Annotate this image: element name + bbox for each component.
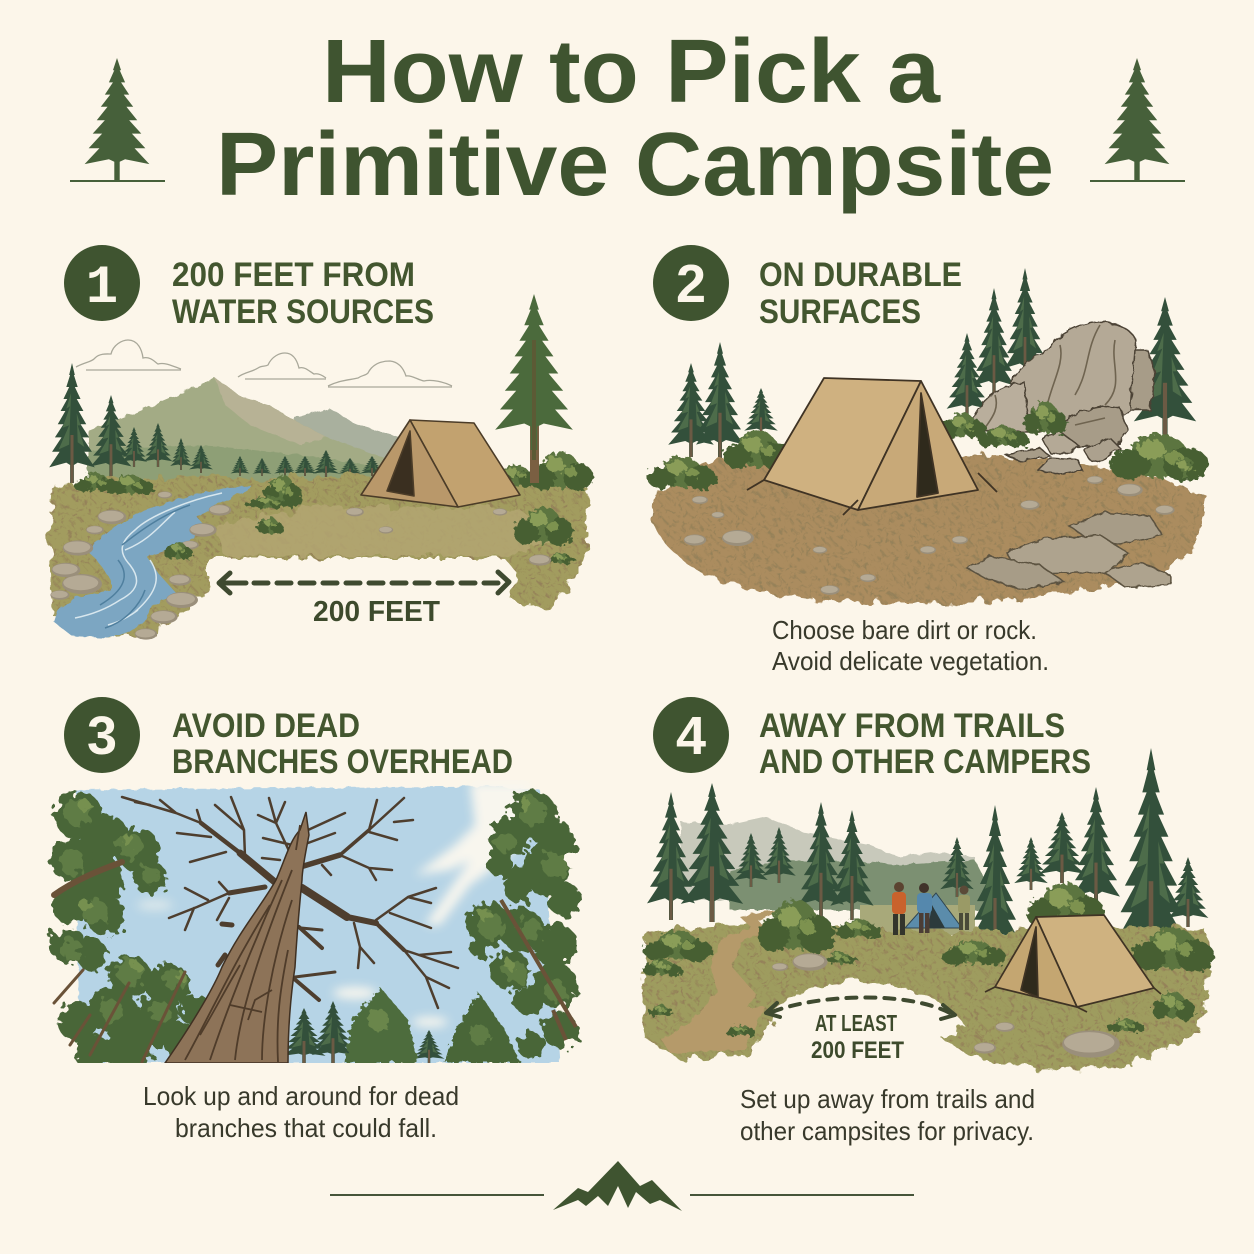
background meadow — [860, 905, 975, 935]
panel: 200 feet from water — [49, 245, 593, 640]
heading: away from trails and other campers — [759, 707, 1091, 781]
illustration: tent on bare ground — [647, 268, 1209, 603]
tent — [985, 915, 1161, 1012]
distance label: 200 FEET — [811, 1037, 904, 1064]
heading: on durable surfaces: SURFACES — [759, 293, 921, 331]
river — [54, 486, 252, 638]
distance label: 200 FEET — [313, 596, 440, 628]
stones — [772, 953, 1120, 1058]
heading: 200 feet from water sources: 200 FEET FROM — [172, 256, 415, 294]
caption — [740, 1084, 1035, 1146]
step number 3 — [64, 697, 140, 773]
hazy mountains — [681, 817, 975, 900]
boulders — [969, 322, 1155, 474]
dirt trail — [662, 910, 780, 1053]
left foliage — [50, 791, 211, 1072]
illustration: campsite away from trail — [642, 748, 1214, 1070]
hazy distant forest — [730, 860, 1000, 910]
step number 4: 4 — [676, 706, 706, 766]
caption: other campsites for privacy. — [740, 1116, 1034, 1146]
distant treetops — [282, 988, 520, 1063]
distance arrow — [219, 572, 509, 593]
caption: Look up and around for dead — [143, 1081, 459, 1111]
step number 1 — [64, 245, 140, 321]
bark texture — [185, 825, 300, 1062]
riverbank stones — [50, 491, 231, 640]
caption — [772, 615, 1049, 676]
camper in blue — [917, 883, 932, 933]
step number 3: 3 — [87, 706, 117, 766]
icon: left pine tree — [70, 58, 165, 182]
tent — [361, 420, 520, 507]
heading: away from trails and other campers: AWAY FROM TRAILS — [759, 707, 1065, 745]
heading: 200 feet from water sources: WATER SOURCES — [172, 293, 434, 331]
heading: on durable surfaces: ON DURABLE — [759, 256, 962, 294]
dry grass patch — [215, 505, 560, 556]
panel: dead branches — [50, 697, 582, 1143]
camper in orange — [892, 882, 906, 935]
tall pine — [495, 294, 573, 483]
clouds — [137, 782, 530, 1027]
sky — [75, 786, 560, 1063]
left tree trunks — [54, 862, 185, 1062]
ground — [650, 455, 1206, 603]
flat rocks — [967, 512, 1172, 589]
forest floor — [642, 923, 1211, 1070]
mountains — [88, 378, 402, 490]
right foliage — [468, 791, 582, 1060]
meadow — [50, 475, 588, 640]
distance arc arrow — [766, 997, 955, 1019]
step number 2: 2 — [676, 254, 706, 314]
bushes — [74, 452, 593, 564]
rock cracks — [985, 325, 1116, 428]
panel: durable surfaces — [647, 245, 1209, 676]
scattered stones — [684, 476, 1175, 595]
title — [216, 22, 1054, 215]
illustration: looking up at a dead tree — [50, 782, 582, 1072]
small ground stones — [346, 508, 551, 566]
title: Primitive Campsite — [216, 115, 1054, 215]
camper in olive — [958, 886, 970, 930]
caption: Avoid delicate vegetation. — [772, 646, 1049, 676]
tent — [747, 378, 997, 515]
heading: away from trails and other campers: AND OTHER CAMPERS — [759, 743, 1091, 781]
caption: Set up away from trails and — [740, 1084, 1035, 1114]
forest — [647, 748, 1208, 970]
tent door — [928, 905, 945, 928]
icon: right pine tree — [1090, 58, 1185, 182]
distant tree line — [49, 363, 384, 483]
heading: avoid dead branches overhead: AVOID DEAD — [172, 707, 360, 745]
panel: away from trails — [642, 697, 1214, 1146]
dead branches — [122, 797, 458, 1008]
pines — [668, 268, 1196, 460]
heading: avoid dead branches overhead — [172, 707, 513, 781]
dead tree trunk — [165, 812, 309, 1063]
heading: 200 feet from water sources — [172, 256, 434, 331]
bushes — [643, 883, 1214, 1036]
step number 4 — [653, 697, 729, 773]
bushes — [647, 401, 1209, 490]
step number 1: 1 — [86, 258, 118, 319]
other campers — [892, 882, 970, 935]
title: How to Pick a — [322, 22, 941, 122]
illustration: river and tent scene — [49, 294, 593, 640]
footer mountain ornament — [330, 1161, 914, 1211]
blue tent — [905, 893, 962, 928]
right tree trunk — [501, 900, 576, 1040]
caption: branches that could fall. — [175, 1113, 437, 1143]
step number 2 — [653, 245, 729, 321]
clouds — [76, 340, 452, 387]
distance label — [811, 1010, 904, 1064]
heading: on durable surfaces — [759, 256, 962, 331]
heading: avoid dead branches overhead: BRANCHES OVERHEAD — [172, 743, 513, 781]
distance label: AT LEAST — [815, 1010, 897, 1036]
caption: Choose bare dirt or rock. — [772, 615, 1037, 645]
caption — [143, 1081, 459, 1143]
